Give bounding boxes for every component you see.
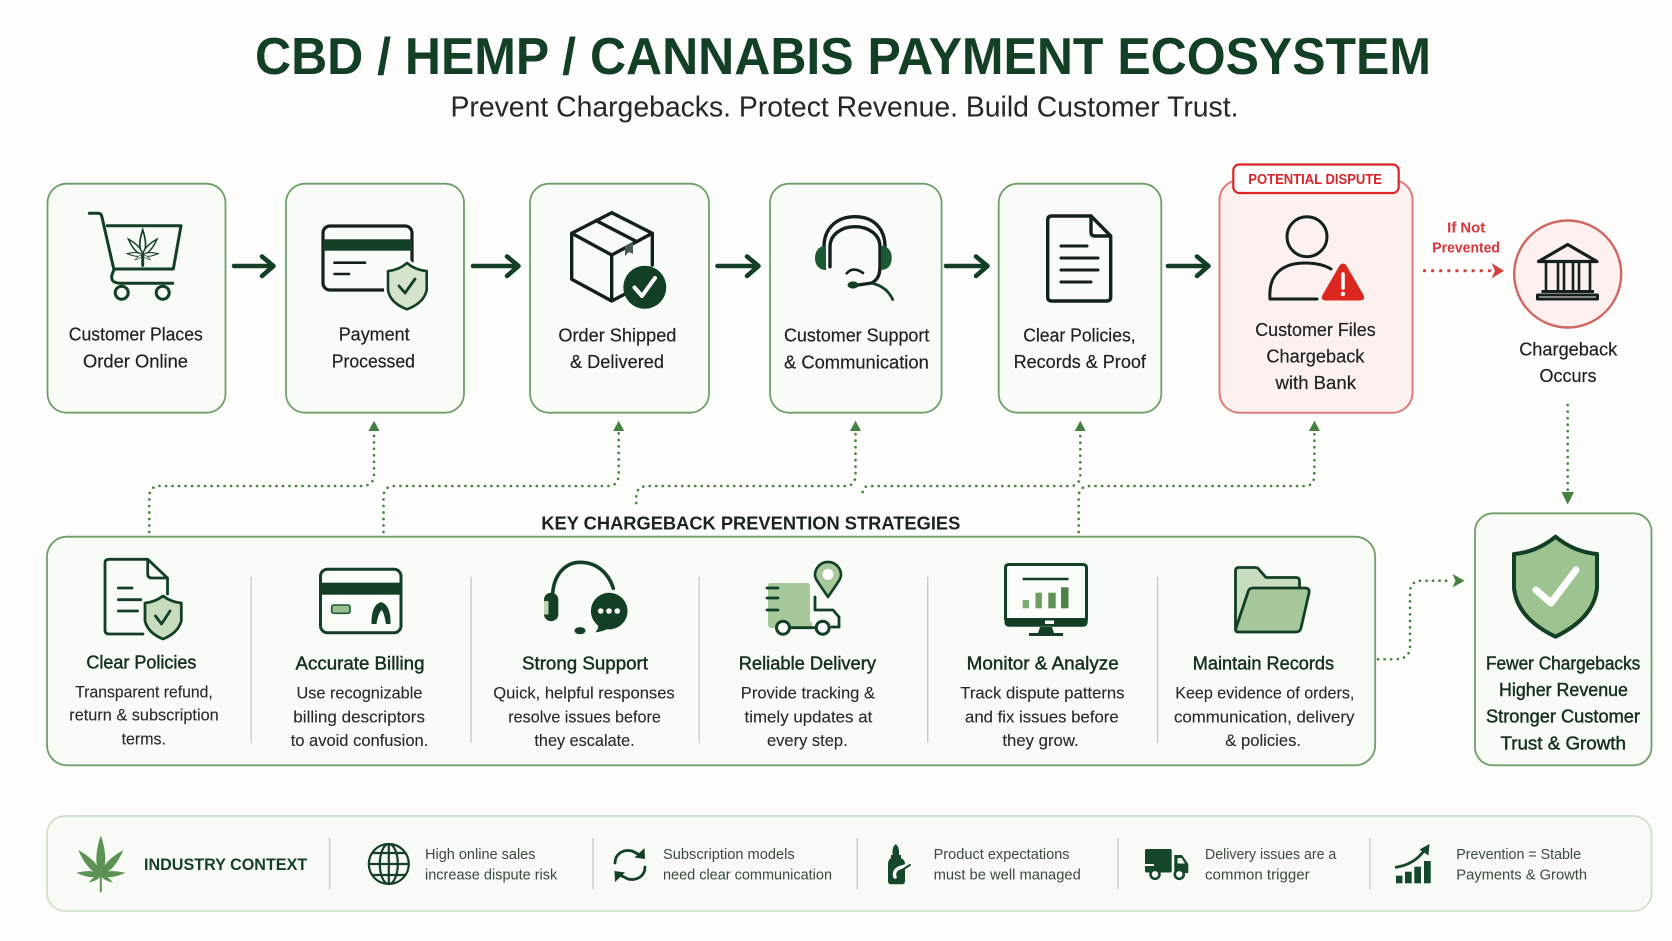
icon: refresh arrows bbox=[614, 848, 645, 882]
icon: headset bbox=[815, 217, 893, 300]
step 3: order shipped bbox=[530, 184, 709, 413]
step label: Clear Policies, bbox=[1023, 325, 1136, 346]
step label: Order Online bbox=[83, 350, 188, 371]
strategy: monitor and analyze: Track dispute patterns bbox=[960, 684, 1124, 703]
strategy: maintain records: & policies. bbox=[1225, 731, 1301, 750]
strategy: monitor and analyze: Monitor & Analyze bbox=[967, 652, 1119, 673]
strategy: strong support: resolve issues before bbox=[508, 707, 661, 726]
strategy: clear policies: Clear Policies bbox=[86, 652, 196, 673]
strategy: clear policies: terms. bbox=[122, 730, 166, 749]
context item: subscriptions bbox=[614, 846, 832, 883]
strategy: strong support: they escalate. bbox=[534, 731, 635, 750]
step label bbox=[69, 324, 203, 371]
icon: credit card bbox=[320, 569, 401, 633]
badge: potential dispute bbox=[1233, 164, 1399, 193]
icon: bank bbox=[1538, 244, 1598, 299]
strategy: accurate billing: to avoid confusion. bbox=[291, 731, 428, 750]
strategies heading: KEY CHARGEBACK PREVENTION STRATEGIES bbox=[541, 512, 960, 533]
strategy: monitor and analyze: they grow. bbox=[1002, 731, 1079, 750]
strategy: maintain records: Keep evidence of orders, bbox=[1175, 684, 1354, 703]
step label: & Communication bbox=[784, 352, 929, 372]
strategy: reliable delivery: Provide tracking & bbox=[741, 684, 876, 703]
icon: document with shield bbox=[105, 559, 181, 639]
step label bbox=[784, 325, 929, 372]
context item: prevention: Payments & Growth bbox=[1456, 866, 1587, 883]
context item: product expectations: Product expectations bbox=[934, 846, 1070, 863]
strategy: clear policies bbox=[69, 559, 219, 749]
step label bbox=[1014, 325, 1147, 372]
arrow 5 bbox=[1168, 256, 1208, 276]
context item: product expectations bbox=[888, 844, 1081, 884]
outcome text: Higher Revenue bbox=[1499, 679, 1628, 700]
strategy: strong support: Strong Support bbox=[522, 652, 648, 673]
step label: Chargeback bbox=[1266, 345, 1365, 366]
icon: hemp leaf bbox=[75, 835, 126, 892]
step label: Records & Proof bbox=[1014, 351, 1147, 372]
icon: globe bbox=[369, 844, 409, 884]
step 6: customer files chargeback bbox=[1220, 164, 1412, 413]
step 1: customer places order bbox=[48, 184, 226, 413]
panel: outcome bbox=[1475, 513, 1652, 765]
strategy: maintain records: communication, delivery bbox=[1174, 707, 1355, 726]
title: CBD / HEMP / CANNABIS PAYMENT ECOSYSTEM bbox=[255, 28, 1431, 86]
context item: online sales: High online sales bbox=[425, 846, 536, 863]
strategy: monitor and analyze: and fix issues before bbox=[965, 707, 1119, 726]
icon: shield with check bbox=[1514, 537, 1597, 637]
step label: Order Shipped bbox=[558, 325, 676, 346]
badge: potential dispute: POTENTIAL DISPUTE bbox=[1248, 172, 1382, 188]
step label: & Delivered bbox=[570, 351, 664, 372]
arrow 2 bbox=[473, 256, 518, 276]
if not prevented label bbox=[1432, 221, 1500, 257]
context item: subscriptions: Subscription models bbox=[663, 846, 795, 863]
strategy: reliable delivery: every step. bbox=[767, 731, 848, 750]
strategy: accurate billing: billing descriptors bbox=[293, 707, 425, 726]
icon: credit card with shield bbox=[323, 226, 427, 309]
step 5: clear policies bbox=[999, 184, 1161, 413]
panel: key chargeback prevention strategies bbox=[47, 537, 1375, 765]
arrow: strategies to outcome bbox=[1378, 574, 1464, 659]
step label: Processed bbox=[332, 350, 415, 371]
if not prevented label: If Not bbox=[1447, 221, 1485, 237]
strategy: accurate billing: Accurate Billing bbox=[296, 652, 424, 673]
chargeback occurs: bank circle bbox=[1514, 220, 1621, 386]
arrow 4 bbox=[946, 256, 988, 276]
icon: truck bbox=[1145, 849, 1188, 879]
strategy: accurate billing: Use recognizable bbox=[296, 684, 422, 703]
arrow: chargeback to outcome bbox=[1562, 405, 1574, 504]
panel: industry context bbox=[47, 816, 1652, 911]
strategy: reliable delivery bbox=[739, 562, 877, 750]
step label bbox=[1255, 319, 1376, 393]
icon: person with warning bbox=[1270, 217, 1364, 300]
strategy: reliable delivery: Reliable Delivery bbox=[739, 652, 877, 673]
strategy: clear policies: return & subscription bbox=[69, 706, 219, 725]
step 2: payment processed bbox=[286, 184, 464, 413]
strategy: clear policies: Transparent refund, bbox=[75, 682, 213, 701]
subtitle: Prevent Chargebacks. Protect Revenue. Build Customer Trust. bbox=[450, 92, 1238, 124]
icon: bottle with dropper bbox=[888, 844, 910, 884]
arrow 3 bbox=[718, 256, 758, 276]
icon: delivery truck and pin bbox=[767, 562, 841, 634]
step label: with Bank bbox=[1274, 372, 1357, 393]
label: chargeback occurs: Chargeback bbox=[1519, 339, 1618, 360]
step label: Customer Files bbox=[1255, 319, 1376, 340]
icon: package with check bbox=[572, 213, 666, 309]
context item: online sales bbox=[369, 844, 558, 884]
outcome text: Stronger Customer bbox=[1486, 706, 1640, 727]
connectors from strategies to steps bbox=[149, 421, 1320, 532]
step label: Customer Support bbox=[784, 325, 929, 346]
context item: delivery: common trigger bbox=[1205, 866, 1310, 883]
step label: Customer Places bbox=[69, 324, 203, 345]
strategy: reliable delivery: timely updates at bbox=[744, 707, 873, 726]
strategy: strong support bbox=[493, 562, 675, 750]
context item: product expectations: must be well managed bbox=[934, 866, 1081, 883]
context item: delivery: Delivery issues are a bbox=[1205, 846, 1337, 863]
icon: monitor with bar chart bbox=[1004, 564, 1088, 636]
if not prevented label: Prevented bbox=[1432, 241, 1500, 257]
strategy: maintain records bbox=[1174, 568, 1355, 750]
step 4: customer support bbox=[770, 184, 942, 413]
outcome text: Fewer Chargebacks bbox=[1486, 652, 1640, 673]
icon: document bbox=[1048, 216, 1111, 301]
outcome text bbox=[1486, 652, 1640, 753]
context item: online sales: increase dispute risk bbox=[425, 866, 558, 883]
icon: headset with chat bubble bbox=[544, 562, 628, 634]
step label bbox=[332, 324, 415, 371]
arrow: dotted red to chargeback bbox=[1424, 263, 1504, 278]
strategy: strong support: Quick, helpful responses bbox=[493, 684, 675, 703]
context item: subscriptions: need clear communication bbox=[663, 866, 832, 883]
context item: delivery bbox=[1145, 846, 1337, 883]
context item: prevention bbox=[1395, 844, 1587, 883]
strategy: accurate billing bbox=[291, 569, 428, 750]
label: chargeback occurs: Occurs bbox=[1540, 365, 1596, 386]
context item: prevention: Prevention = Stable bbox=[1456, 846, 1581, 863]
icon: folder bbox=[1236, 568, 1309, 632]
label: chargeback occurs bbox=[1519, 339, 1618, 386]
icon: growth chart bbox=[1395, 844, 1431, 883]
strategy: maintain records: Maintain Records bbox=[1193, 652, 1334, 673]
step label: Payment bbox=[339, 324, 410, 345]
outcome text: Trust & Growth bbox=[1500, 732, 1626, 753]
strategy: monitor and analyze bbox=[960, 564, 1124, 750]
arrow 1 bbox=[234, 256, 274, 276]
step label bbox=[558, 325, 676, 372]
icon: shopping cart with leaf bbox=[89, 213, 181, 299]
heading: industry context: INDUSTRY CONTEXT bbox=[144, 855, 308, 874]
